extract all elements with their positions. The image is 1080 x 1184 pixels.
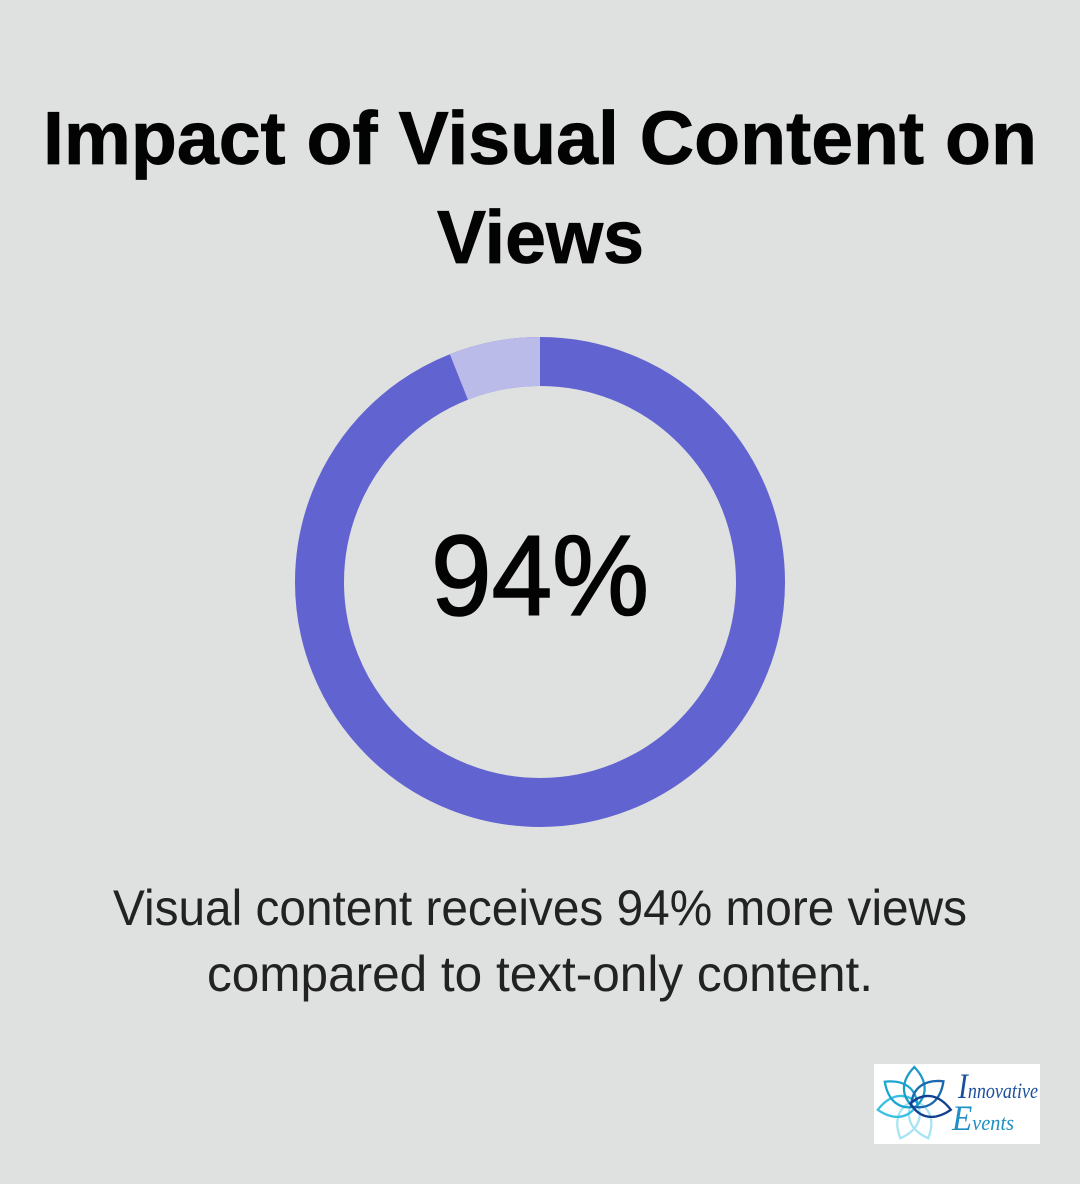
logo wordmark: Innovative (957, 1066, 1038, 1106)
title: Views (437, 195, 644, 279)
ring base segment 94% (320, 362, 760, 802)
logo: Innovative Events (874, 1064, 1040, 1144)
logo wordmark: Events (951, 1098, 1014, 1138)
description text: compared to text-only content. (207, 946, 873, 1002)
center value: 94% (431, 513, 649, 640)
logo wordmark (951, 1066, 1038, 1138)
icon: flower (876, 1067, 952, 1142)
title: Impact of Visual Content on (43, 96, 1037, 180)
description text: Visual content receives 94% more views (113, 880, 967, 936)
title (43, 96, 1037, 279)
ring remainder segment 6% (459, 362, 540, 377)
description text (113, 880, 967, 1002)
donut chart: 94% (320, 362, 760, 802)
